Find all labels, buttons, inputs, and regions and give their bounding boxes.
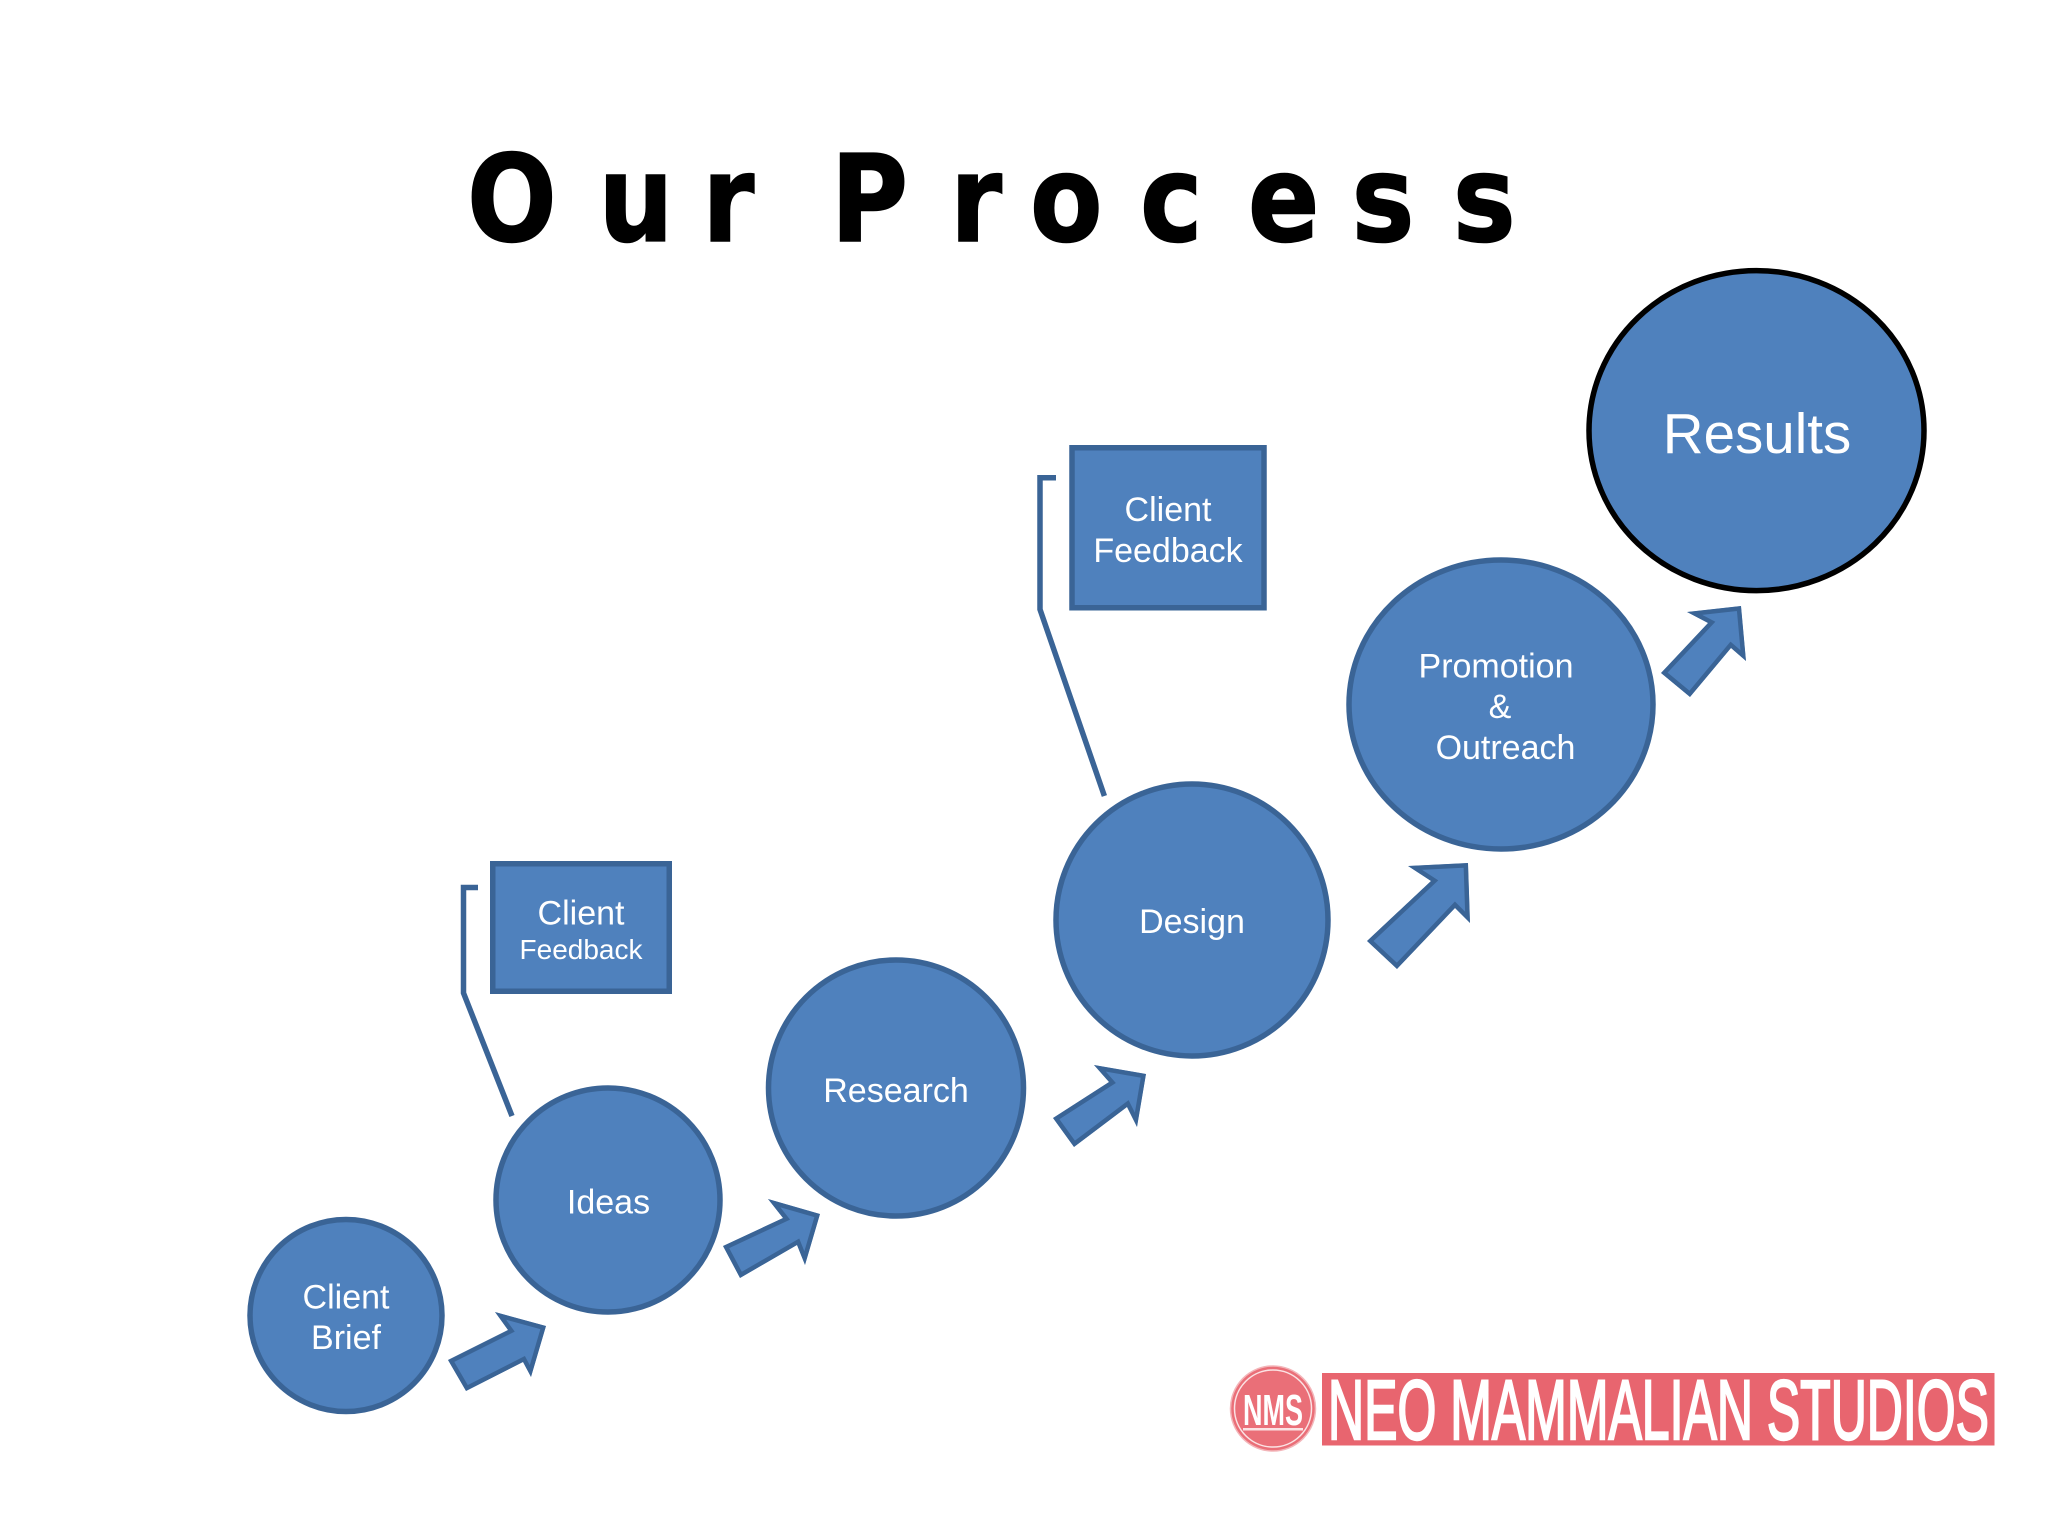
- arrow: Promotion to Results: [1661, 606, 1746, 697]
- arrow: Client Brief to Ideas: [448, 1312, 546, 1391]
- callout: Client Feedback (lower): Client: [538, 894, 625, 932]
- arrow: Ideas to Research: [723, 1199, 820, 1278]
- step: Results: [1589, 271, 1924, 591]
- title: Our Process: [467, 130, 1516, 270]
- step: Promotion & Outreach: Promotion: [1419, 648, 1573, 686]
- callout: Client Feedback (lower): [493, 864, 669, 991]
- step: Ideas: [496, 1088, 720, 1312]
- step: Design: Design: [1139, 903, 1245, 941]
- step: Promotion & Outreach: &: [1489, 688, 1512, 726]
- callout: Client Feedback (lower): Feedback: [520, 934, 643, 965]
- callout: Client Feedback (upper): Client: [1125, 491, 1212, 529]
- logo badge: [1230, 1366, 1316, 1451]
- step: Research: [768, 960, 1024, 1216]
- step: Client Brief: Brief: [311, 1319, 382, 1357]
- step: Promotion & Outreach: [1349, 560, 1653, 849]
- connector: lower feedback to Ideas: [464, 888, 512, 1116]
- step: Client Brief: Client: [303, 1278, 390, 1316]
- step: Client Brief: [250, 1220, 442, 1412]
- logo badge: NMS: [1243, 1386, 1303, 1435]
- step: Ideas: Ideas: [567, 1184, 650, 1222]
- step: Design: [1056, 784, 1328, 1056]
- step: Research: Research: [823, 1072, 969, 1110]
- arrow: Design to Promotion: [1367, 863, 1470, 969]
- callout: Client Feedback (upper): Feedback: [1093, 532, 1244, 570]
- callout: Client Feedback (upper): [1072, 448, 1264, 608]
- arrow: Research to Design: [1053, 1065, 1146, 1147]
- connector: upper feedback to Design: [1040, 478, 1104, 796]
- logo: Neo Mammalian Studios: [1230, 1363, 1994, 1457]
- step: Promotion & Outreach: Outreach: [1436, 729, 1575, 767]
- step: Results: Results: [1663, 402, 1851, 465]
